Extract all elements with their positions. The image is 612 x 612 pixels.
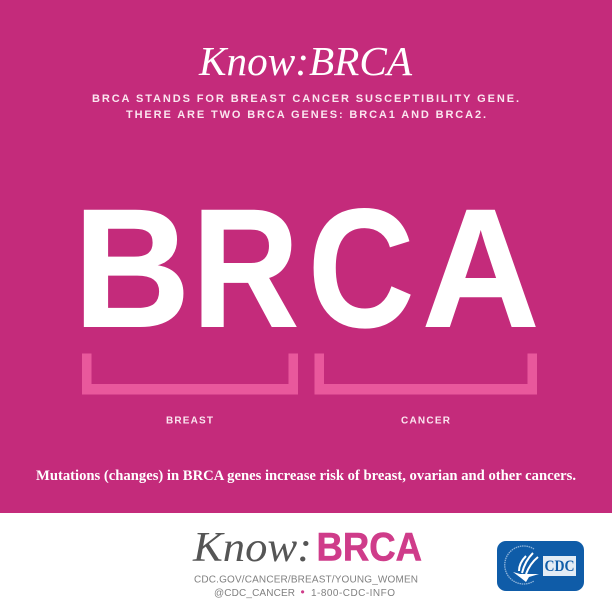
label: cancer: CANCER bbox=[401, 415, 451, 426]
CDC logo bbox=[497, 541, 584, 591]
logo CDC box: CDC bbox=[544, 558, 574, 575]
logo seal ring bbox=[505, 546, 534, 584]
intro text: BRCA STANDS FOR BREAST CANCER SUSCEPTIBILITY GENE. bbox=[92, 93, 519, 105]
large BRCA wordmark bbox=[74, 173, 539, 363]
large BRCA wordmark: R bbox=[192, 173, 299, 363]
footer contact line: • bbox=[300, 585, 305, 599]
large BRCA wordmark: B bbox=[74, 174, 190, 363]
footer contact line: 1-800-CDC-INFO bbox=[311, 588, 395, 599]
bracket: cancer bbox=[314, 354, 537, 394]
label: breast: BREAST bbox=[166, 415, 213, 426]
intro text bbox=[92, 93, 519, 121]
mutations statement: Mutations (changes) in BRCA genes increase risk of breast, ovarian and other cancers. bbox=[36, 468, 576, 484]
logo eagle emblem bbox=[513, 553, 539, 582]
footer contact line bbox=[214, 585, 395, 599]
footer logo: BRCA: BRCA bbox=[316, 526, 422, 570]
large BRCA wordmark: C bbox=[308, 174, 414, 363]
large BRCA wordmark: A bbox=[422, 175, 539, 363]
bracket: breast bbox=[82, 354, 298, 394]
footer logo: Know: Know: bbox=[192, 525, 312, 571]
title: Know:BRCA bbox=[198, 38, 413, 84]
footer panel bbox=[0, 513, 612, 612]
intro text: THERE ARE TWO BRCA GENES: BRCA1 AND BRCA2. bbox=[126, 109, 486, 121]
footer contact line: @CDC_CANCER bbox=[214, 588, 295, 599]
footer url: CDC.GOV/CANCER/BREAST/YOUNG_WOMEN bbox=[194, 574, 418, 586]
